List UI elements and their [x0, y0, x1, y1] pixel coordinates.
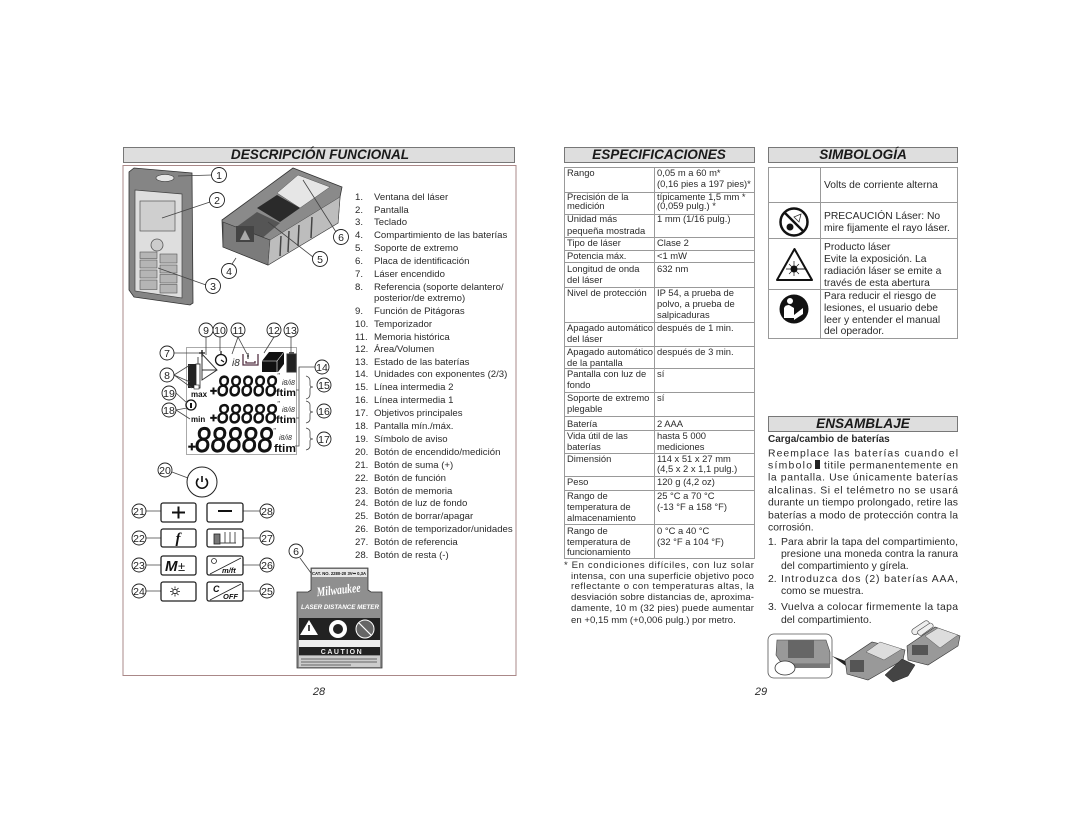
callouts: LCD numbers: 12: [268, 325, 280, 337]
list: numbered parts: 5.: [355, 243, 363, 254]
list: numbered parts: Pantalla mín./máx.: [374, 421, 453, 432]
button: function: f: [176, 531, 182, 547]
list: assembly steps: como se muestra.: [781, 586, 864, 597]
button: reference: [207, 529, 243, 547]
text block: battery instructions: alcalinas. Si el telémetro no se usará: [768, 486, 958, 496]
table: specifications: después de 3 min.: [657, 346, 734, 357]
list: numbered parts: Objetivos principales: [374, 408, 463, 419]
list: numbered parts: 3.: [355, 217, 363, 228]
digits: row 16: 88888: [217, 399, 277, 429]
table: specifications: Batería: [567, 418, 598, 429]
heading: Ensamblaje: ENSAMBLAJE: [816, 416, 911, 431]
callouts: LCD numbers: 9: [203, 325, 209, 337]
table: specifications: (4,5 x 2 x 1,1 pulg.): [657, 463, 737, 474]
text block: battery instructions: Reemplace las baterías cuando el: [768, 448, 958, 460]
list: assembly steps: 3.: [768, 602, 777, 613]
callouts: keypad numbers: 22: [133, 533, 145, 545]
table: specifications: (-13 °F a 158 °F): [657, 501, 727, 512]
identification plate sticker: CAUTION: [321, 649, 363, 656]
list: numbered parts: Botón de luz de fondo: [374, 498, 467, 509]
heading: Descripción funcional: [124, 147, 514, 162]
list: numbered parts: 16.: [355, 395, 368, 406]
table: specifications: salpicaduras: [657, 309, 710, 320]
callouts: device part numbers: 3: [210, 281, 216, 293]
list: assembly steps: 2.: [768, 574, 777, 585]
table: specifications: Longitud de onda: [567, 263, 640, 274]
list: numbered parts: 26.: [355, 524, 368, 535]
text block: battery instructions: durante un tiempo prolongado, retire las: [768, 498, 958, 508]
heading: Especificaciones: [564, 147, 754, 162]
button: memory: ±: [178, 559, 185, 574]
digits: row 16: ": [277, 401, 280, 408]
subheading: battery replacement: Carga/cambio de baterías: [768, 434, 890, 445]
list: numbered parts: Línea intermedia 2: [374, 382, 453, 393]
button: function: [161, 529, 196, 547]
identification plate sticker: [289, 544, 382, 668]
table: specifications: sí: [657, 368, 665, 379]
callouts: keypad numbers: 26: [261, 560, 273, 572]
button: clear and off: C: [213, 584, 220, 594]
list: numbered parts: posterior/de extremo): [374, 293, 465, 304]
illustration: device front view: [129, 168, 193, 305]
list: numbered parts: 25.: [355, 511, 368, 522]
illustration: battery installation: [768, 621, 960, 682]
table: specifications: Peso: [567, 476, 588, 487]
list: numbered parts: 12.: [355, 344, 368, 355]
list: numbered parts: 18.: [355, 421, 368, 432]
list: numbered parts: 2.: [355, 205, 363, 216]
table: symbols: PRECAUCIÓN Láser: No: [824, 209, 940, 222]
table: specifications: Rango de: [567, 525, 608, 536]
list: numbered parts: Referencia (soporte delantero/: [374, 282, 504, 293]
digits: row 17: ": [273, 428, 276, 435]
heading: Especificaciones: ESPECIFICACIONES: [592, 147, 726, 162]
digits: row 15: ": [277, 373, 280, 380]
callouts: LCD numbers: 10: [214, 325, 226, 337]
list: numbered parts: 21.: [355, 460, 368, 471]
list: assembly steps: Para abrir la tapa del compartimiento,: [781, 537, 958, 548]
callouts: keypad numbers: 25: [261, 586, 273, 598]
table: specifications: Tipo de láser: [567, 237, 621, 248]
callouts: LCD numbers: 8: [164, 370, 170, 382]
digits: row 15: +: [210, 384, 217, 398]
text block: battery instructions: [768, 448, 958, 534]
callouts: LCD numbers: 16: [318, 406, 330, 418]
icon: no laser stare: [780, 208, 808, 236]
callouts: device part numbers: 1: [216, 170, 222, 182]
callouts: device part numbers: 4: [226, 266, 232, 278]
device with open compartment: [907, 627, 960, 665]
digits: row 16: +: [210, 411, 217, 425]
table: specifications: Pantalla con luz de: [567, 368, 646, 379]
list: numbered parts: Unidades con exponentes (2/3): [374, 369, 507, 380]
icon: laser warning triangle: [777, 249, 812, 280]
list: numbered parts: 15.: [355, 382, 368, 393]
digits: row 17: i8/i8: [279, 435, 292, 442]
list: numbered parts: Botón de borrar/apagar: [374, 511, 474, 522]
panel: functional description: [123, 166, 516, 676]
text block: battery instructions: la pantalla. Use únicamente baterías: [768, 472, 958, 484]
table: symbols: leer y entender el manual: [824, 315, 940, 326]
table: specifications: medición: [567, 200, 605, 211]
icon: battery: [287, 352, 296, 372]
batteries: [912, 621, 933, 635]
table: symbols: Para reducir el riesgo de: [824, 291, 936, 302]
table: specifications: funcionamiento: [567, 546, 631, 557]
button: timer and units: [207, 556, 243, 575]
callouts: LCD numbers: [160, 323, 331, 450]
table: specifications: Rango de: [567, 490, 608, 501]
table: specifications: Apagado automático: [567, 322, 653, 333]
callouts: keypad numbers: 21: [133, 506, 145, 518]
icon: timer: [216, 351, 226, 366]
list: numbered parts: 6.: [355, 256, 363, 267]
table: symbols: [768, 168, 958, 338]
removed cover: [885, 659, 915, 682]
icon: history memory: i8: [232, 358, 240, 369]
text block: battery instructions: titile permanentemente en: [824, 460, 958, 472]
buttons: keypad: [132, 503, 274, 601]
list: numbered parts: 24.: [355, 498, 368, 509]
table: symbols: mire fijamente el rayo láser.: [824, 223, 950, 234]
button: memory: [161, 556, 196, 575]
list: numbered parts: Memoria histórica: [374, 332, 450, 343]
callouts: device part numbers: 2: [214, 195, 220, 207]
table: specifications: temperatura de: [567, 536, 631, 547]
callouts: LCD numbers: 14: [316, 362, 328, 374]
table: specifications: (0,16 pies a 197 pies)*: [657, 178, 751, 189]
label: max: max: [191, 390, 208, 399]
list: numbered parts: 23.: [355, 486, 368, 497]
identification plate sticker: LASER DISTANCE METER: [301, 604, 379, 611]
page number 28: 28: [312, 686, 326, 698]
table: symbols: Producto láser: [824, 242, 891, 253]
table: symbols: lesiones, el usuario debe: [824, 303, 938, 314]
list: numbered parts: Láser encendido: [374, 269, 445, 280]
table: specifications: baterías: [567, 441, 601, 452]
table: specifications: de la pantalla: [567, 357, 624, 368]
page number 29: 29: [754, 686, 767, 698]
table: specifications: 2 AAA: [657, 418, 684, 429]
list: numbered parts: Pantalla: [374, 205, 409, 216]
footnote: intensa, con una superficie objetivo poco: [571, 571, 754, 582]
footnote: * En condiciones difíciles, con luz solar: [564, 560, 755, 571]
callouts: keypad numbers: 27: [261, 533, 273, 545]
list: numbered parts: Temporizador: [374, 319, 433, 330]
digits: row 17: +: [188, 439, 196, 454]
table: specifications: 0,05 m a 60 m*: [657, 167, 721, 178]
inset: coin slot detail: [768, 634, 832, 678]
table: specifications: almacenamiento: [567, 512, 636, 523]
callouts: LCD numbers: 7: [164, 348, 170, 360]
label: min: min: [191, 415, 205, 424]
footnote: reflectante o con temperaturas altas, la: [571, 581, 755, 592]
table: specifications: temperatura de: [567, 501, 631, 512]
device with cover: [845, 642, 905, 680]
list: numbered parts: Estado de las baterías: [374, 357, 470, 368]
table: specifications: Clase 2: [657, 237, 689, 248]
list: numbered parts: 9.: [355, 306, 363, 317]
list: numbered parts: 8.: [355, 282, 363, 293]
callouts: keypad numbers: 28: [261, 506, 273, 518]
table: symbols: través de esta abertura: [824, 278, 930, 289]
list: numbered parts: Compartimiento de las baterías: [374, 230, 508, 241]
list: numbered parts: 28.: [355, 550, 368, 561]
table: specifications: 1 mm (1/16 pulg.): [657, 213, 730, 224]
list: assembly steps: del compartimiento.: [781, 615, 872, 626]
button: power: [158, 463, 217, 497]
list: numbered parts: Placa de identificación: [374, 256, 469, 267]
table: specifications: Apagado automático: [567, 346, 653, 357]
list: numbered parts: Ventana del láser: [374, 192, 449, 203]
button: backlight: [161, 582, 196, 601]
list: numbered parts: 4.: [355, 230, 363, 241]
list: numbered parts: Teclado: [374, 217, 407, 228]
identification plate sticker: CAT. NO. 2280-20 3V⎓ 0,3A: [312, 571, 367, 576]
list: numbered parts: 20.: [355, 447, 368, 458]
list: numbered parts: Botón de temporizador/unidades: [374, 524, 513, 535]
table: specifications: mediciones: [657, 441, 705, 452]
list: numbered parts: Botón de función: [374, 473, 446, 484]
heading: Descripción funcional: DESCRIPCIÓN FUNCIONAL: [231, 147, 409, 162]
heading: Ensamblaje: [768, 416, 958, 432]
callouts: keypad numbers: [132, 504, 274, 598]
callouts: device part numbers: [158, 168, 348, 294]
footnote: en +0,15 mm (+0,006 pulg.) por metro.: [571, 615, 736, 626]
digits: row 17: 88888: [195, 421, 273, 460]
callouts: LCD numbers: 19: [163, 388, 175, 400]
table: specifications: Vida útil de las: [567, 430, 628, 441]
list: numbered parts: Soporte de extremo: [374, 243, 458, 254]
list: numbered parts: 1.: [355, 192, 363, 203]
table: specifications: sí: [657, 392, 665, 403]
button: power: 20: [159, 465, 171, 477]
callouts: LCD numbers: 13: [285, 325, 297, 337]
heading: Simbología: [768, 147, 958, 162]
callouts: LCD numbers: 11: [233, 325, 244, 337]
table: specifications: <1 mW: [657, 250, 687, 261]
button: timer and units: m/ft: [222, 566, 236, 575]
button: clear and off: OFF: [223, 592, 238, 601]
list: numbered parts: Botón de encendido/medición: [374, 447, 500, 458]
digits: row 17: ftim: [274, 443, 296, 455]
list: assembly steps: presione una moneda contra la ranura: [781, 549, 958, 560]
list: numbered parts: Botón de resta (-): [374, 550, 449, 561]
table: specifications: fondo: [567, 379, 590, 390]
table: specifications: Dimensión: [567, 453, 611, 464]
text block: battery instructions: baterías a modo de protección contra la: [768, 510, 958, 522]
list: numbered parts: 13.: [355, 357, 368, 368]
button: clear and off: [207, 582, 243, 601]
list: numbered parts: Botón de suma (+): [374, 460, 453, 471]
table: symbols: Evite la exposición. La: [824, 254, 927, 265]
table: specifications: 120 g (4,2 oz): [657, 476, 715, 487]
table: specifications: [564, 167, 755, 558]
table: specifications: Nivel de protección: [567, 287, 647, 298]
callouts: keypad numbers: 24: [133, 586, 145, 598]
LCD display diagram: [186, 348, 296, 460]
list: numbered parts: 19.: [355, 434, 368, 445]
table: specifications: del láser: [567, 274, 602, 285]
list: numbered parts: 22.: [355, 473, 368, 484]
digits: row 15: i8/i8: [282, 380, 295, 387]
table: symbols: Volts de corriente alterna: [824, 180, 938, 191]
digits: row 15: ftim: [276, 388, 296, 399]
list: numbered parts: 10.: [355, 319, 368, 330]
icon: area and volume cube: [262, 352, 284, 372]
table: specifications: 114 x 51 x 27 mm: [657, 453, 731, 464]
list: numbered parts: 11.: [355, 332, 368, 343]
list: numbered parts: Función de Pitágoras: [374, 306, 465, 317]
list: assembly steps: Vuelva a colocar firmemente la tapa: [781, 602, 958, 613]
list: numbered parts: Área/Volumen: [374, 344, 434, 355]
list: numbered parts: 27.: [355, 537, 368, 548]
list: assembly steps: del compartimiento y gírela.: [781, 561, 909, 572]
table: specifications: IP 54, a prueba de: [657, 287, 734, 298]
button: plus: [161, 503, 196, 522]
callouts: device part numbers: 5: [317, 254, 323, 266]
text block: battery instructions: corrosión.: [768, 522, 814, 534]
icon: read manual: [780, 294, 808, 324]
table: symbols: radiación láser se emite a: [824, 266, 942, 277]
callouts: keypad numbers: 23: [133, 560, 145, 572]
icon: laser and reference symbols: [188, 350, 217, 389]
list: assembly steps: Introduzca dos (2) baterías AAA,: [781, 574, 958, 585]
footnote: desviación sobre distancias de, aproxima-: [571, 592, 754, 603]
callouts: LCD numbers: 15: [318, 380, 330, 392]
table: specifications: del láser: [567, 333, 602, 344]
table: specifications: plegable: [567, 403, 602, 414]
list: numbered parts: Botón de memoria: [374, 486, 453, 497]
list: numbered parts: Símbolo de aviso: [374, 434, 448, 445]
list: numbered parts: Botón de referencia: [374, 537, 458, 548]
digits: row 16: ftim: [276, 415, 296, 426]
table: symbols: del operador.: [824, 326, 884, 337]
identification plate sticker: Milwaukee: [315, 580, 361, 599]
list: numbered parts: Línea intermedia 1: [374, 395, 453, 406]
table: specifications: 25 °C a 70 °C: [657, 490, 715, 501]
callouts: LCD numbers: 17: [318, 434, 330, 446]
table: specifications: después de 1 min.: [657, 322, 734, 333]
digits: row 15: 88888: [217, 371, 277, 403]
list: numbered parts: 14.: [355, 369, 368, 380]
digits: row 16: i8/i8: [282, 407, 295, 414]
list: assembly steps: 1.: [768, 537, 777, 548]
table: specifications: Rango: [567, 167, 595, 178]
icon: warning info: [186, 400, 196, 410]
button: memory: M: [165, 558, 178, 575]
button: minus: [207, 503, 243, 522]
table: specifications: Potencia máx.: [567, 250, 626, 261]
table: specifications: 632 nm: [657, 263, 688, 274]
table: specifications: Soporte de extremo: [567, 392, 649, 403]
table: specifications: Precisión de la: [567, 191, 629, 202]
heading: Simbología: SIMBOLOGÍA: [819, 147, 907, 162]
footnote: damente, 10 m (32 pies) puede aumentar: [571, 603, 755, 614]
footnote: [564, 560, 755, 626]
table: specifications: 0 °C a 40 °C: [657, 525, 710, 536]
list: numbered parts: 7.: [355, 269, 363, 280]
table: specifications: (32 °F a 104 °F): [657, 536, 724, 547]
table: specifications: Unidad más: [567, 213, 617, 224]
callouts: device part numbers: 6: [338, 232, 344, 244]
illustration: device rear view: [222, 168, 342, 265]
list: numbered parts: 17.: [355, 408, 368, 419]
table: specifications: polvo, a prueba de: [657, 298, 735, 309]
table: specifications: hasta 5 000: [657, 430, 706, 441]
callouts: LCD numbers: 18: [163, 405, 175, 417]
text block: battery instructions: símbolo: [768, 460, 812, 472]
table: specifications: (0,059 pulg.) *: [657, 200, 716, 211]
table: specifications: típicamente 1,5 mm *: [657, 191, 746, 202]
identification plate sticker: 6: [293, 546, 299, 558]
table: specifications: pequeña mostrada: [567, 225, 646, 236]
list: numbered parts: [355, 192, 513, 561]
list: assembly steps: [768, 537, 958, 626]
